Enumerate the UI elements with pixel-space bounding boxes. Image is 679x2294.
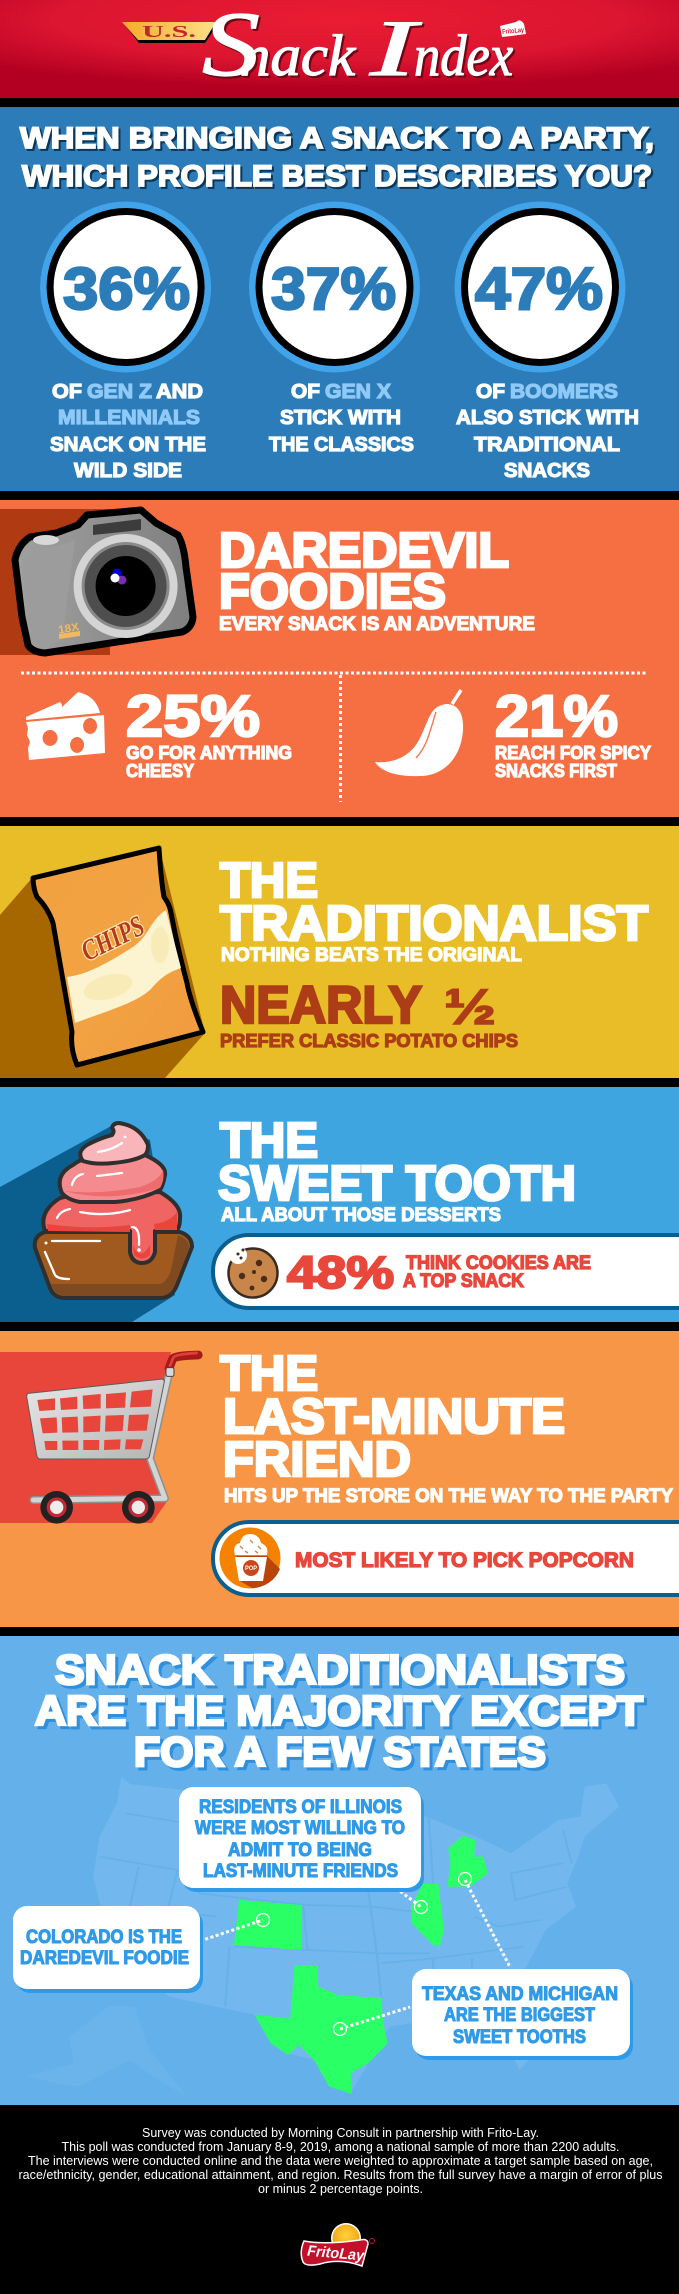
stat: 25% cheesy: GO FOR ANYTHING [126,742,292,763]
heading: The Traditionalist: THE [220,854,318,908]
question heading: WHEN BRINGING A SNACK TO A PARTY, [20,122,654,155]
stat: 25% cheesy: CHEESY [126,760,195,781]
stat: 21% spicy: SNACKS FIRST [495,760,618,781]
icon: cheese [26,692,105,760]
icon: cookie [228,1246,278,1298]
stat: 47% [454,202,626,372]
map: United States [26,1777,619,2097]
caption: Gen Z and Millennials [50,381,206,482]
heading: The Traditionalist: TRADITIONALIST [220,897,648,951]
stat caption [403,1253,591,1292]
heading: The Traditionalist [220,854,648,951]
title: Snack Index: ndex [414,23,513,88]
stat: 36% [40,202,211,372]
stat: 48%: 48% [287,1247,394,1298]
caption: Gen Z and Millennials: OF [52,381,82,403]
callout: Colorado: COLORADO IS THE [26,1927,182,1948]
panel: The Sweet Tooth [0,1087,679,1322]
icon: chip bag [33,848,203,1065]
survey note: Survey was conducted by Morning Consult in partnership with Frito-Lay. [142,2126,539,2140]
icon: camera [0,509,193,655]
callout: cookies pill [213,1235,679,1308]
panel: state map [0,1636,679,2105]
icon: camera: 18X [57,621,81,637]
heading: Daredevil Foodies [219,524,509,619]
caption: Gen Z and Millennials: AND [156,381,203,403]
small Frito-Lay mark: FritoLay [502,27,525,36]
icon: chip bag: CHIPS [76,910,150,968]
callout: popcorn pill [213,1522,679,1595]
callout: Illinois: WERE MOST WILLING TO [195,1818,405,1839]
stat: nearly half: PREFER CLASSIC POTATO CHIPS [220,1030,518,1051]
caption: Gen Z and Millennials: MILLENNIALS [58,407,200,429]
caption: Gen X: STICK WITH [280,407,401,429]
small Frito-Lay mark [500,20,526,37]
caption: Gen Z and Millennials: GEN Z [87,381,152,403]
heading: The Sweet Tooth: SWEET TOOTH [218,1157,576,1211]
question heading: WHICH PROFILE BEST DESCRIBES YOU? [22,160,652,193]
caption: Gen Z and Millennials: SNACK ON THE [50,434,206,456]
icon: popcorn: POP [245,1566,257,1572]
callout: Illinois [179,1787,424,1892]
heading: traditionalists majority: ARE THE MAJORITY EXCEPT [35,1687,643,1734]
caption: Boomers: BOOMERS [510,381,618,403]
stat: 21% spicy: 21% [495,684,618,749]
title: Snack Index [202,0,513,95]
stat: 21% spicy: REACH FOR SPICY [495,742,652,763]
icon: chili pepper [375,690,463,776]
survey note: race/ethnicity, gender, educational attainment, and region. Results from the full survey have a margin of error of plus [18,2168,662,2182]
caption: Gen X [269,381,414,456]
callout: Texas and Michigan: ARE THE BIGGEST [444,2005,595,2026]
heading: The Last-Minute Friend: FRIEND [223,1433,411,1487]
callout: Texas and Michigan [412,1969,633,2060]
title: Snack Index: I [368,5,422,93]
panel: The Last-Minute Friend [0,1331,679,1627]
callout: Texas and Michigan: SWEET TOOTHS [453,2027,586,2048]
stat: nearly half [220,976,518,1051]
heading: Daredevil Foodies: DAREDEVIL [219,524,509,578]
header banner [0,0,679,98]
subheading: HITS UP THE STORE ON THE WAY TO THE PARTY [224,1486,673,1507]
callout: Illinois: LAST-MINUTE FRIENDS [203,1861,398,1882]
title: Snack Index: nack [240,23,356,88]
heading: Daredevil Foodies: FOODIES [219,565,446,619]
panel: party snack question [0,107,679,491]
footer [18,2126,662,2266]
callout text: MOST LIKELY TO PICK POPCORN [295,1548,634,1572]
callout: Illinois: ADMIT TO BEING [228,1840,372,1861]
caption: Boomers: SNACKS [504,460,590,482]
heading: The Last-Minute Friend: THE [220,1347,318,1401]
callout: Colorado: DAREDEVIL FOODIE [20,1948,189,1969]
heading: The Sweet Tooth: THE [220,1114,318,1168]
logo: Frito-Lay [301,2223,374,2266]
stat: nearly half: NEARLY [220,976,422,1035]
callout: Texas and Michigan: TEXAS AND MICHIGAN [422,1984,618,2005]
question heading [20,122,654,193]
icon: popcorn [220,1528,280,1588]
stat: 37%: 37% [271,256,396,322]
caption: Boomers: OF [476,381,505,403]
heading: The Last-Minute Friend [220,1347,565,1487]
stat: 36%: 36% [63,256,190,322]
subheading: EVERY SNACK IS AN ADVENTURE [219,614,535,635]
heading: traditionalists majority: SNACK TRADITIONALISTS [55,1646,625,1693]
stat: nearly half: ½ [444,979,496,1035]
survey note: The interviews were conducted online and the data were weighted to approximate a target sample based on age, [28,2154,653,2168]
heading: traditionalists majority: FOR A FEW STATES [134,1728,546,1775]
survey note [18,2126,662,2196]
stat caption: THINK COOKIES ARE [406,1253,591,1274]
caption: Gen X: OF [291,381,320,403]
subheading: NOTHING BEATS THE ORIGINAL [221,945,522,966]
caption: Boomers: TRADITIONAL [474,434,620,456]
stat: 47%: 47% [475,256,603,322]
stat: 21% spicy [495,684,652,781]
caption: Gen X: GEN X [325,381,392,403]
heading: The Sweet Tooth [218,1114,576,1211]
caption: Boomers [456,381,639,482]
stat: 25% cheesy [126,684,292,781]
heading: The Last-Minute Friend: LAST-MINUTE [223,1390,565,1444]
callout: Illinois: RESIDENTS OF ILLINOIS [199,1797,402,1818]
icon: shopping cart [27,1353,198,1524]
caption: Boomers: ALSO STICK WITH [456,407,639,429]
stat caption: A TOP SNACK [403,1271,524,1292]
caption: Gen Z and Millennials: WILD SIDE [74,460,182,482]
panel: The Traditionalist [0,826,679,1078]
caption: Gen X: THE CLASSICS [269,434,414,456]
heading: traditionalists majority [35,1646,643,1775]
callout: Colorado [13,1906,203,1993]
icon: cupcake [35,1123,192,1298]
U.S. badge: U.S. [142,22,196,41]
panel: Daredevil Foodies [0,500,679,817]
U.S. badge [122,22,218,43]
subheading: ALL ABOUT THOSE DESSERTS [221,1205,501,1226]
survey note: This poll was conducted from January 8-9, 2019, among a national sample of more than 2200 adults. [62,2140,620,2154]
highlighted states [234,1836,488,2094]
stat: 37% [249,202,420,372]
connector lines and markers [200,1872,510,2036]
logo: Frito-Lay: FritoLay [306,2243,365,2265]
survey note: or minus 2 percentage points. [258,2182,423,2196]
stat: 25% cheesy: 25% [126,684,260,749]
